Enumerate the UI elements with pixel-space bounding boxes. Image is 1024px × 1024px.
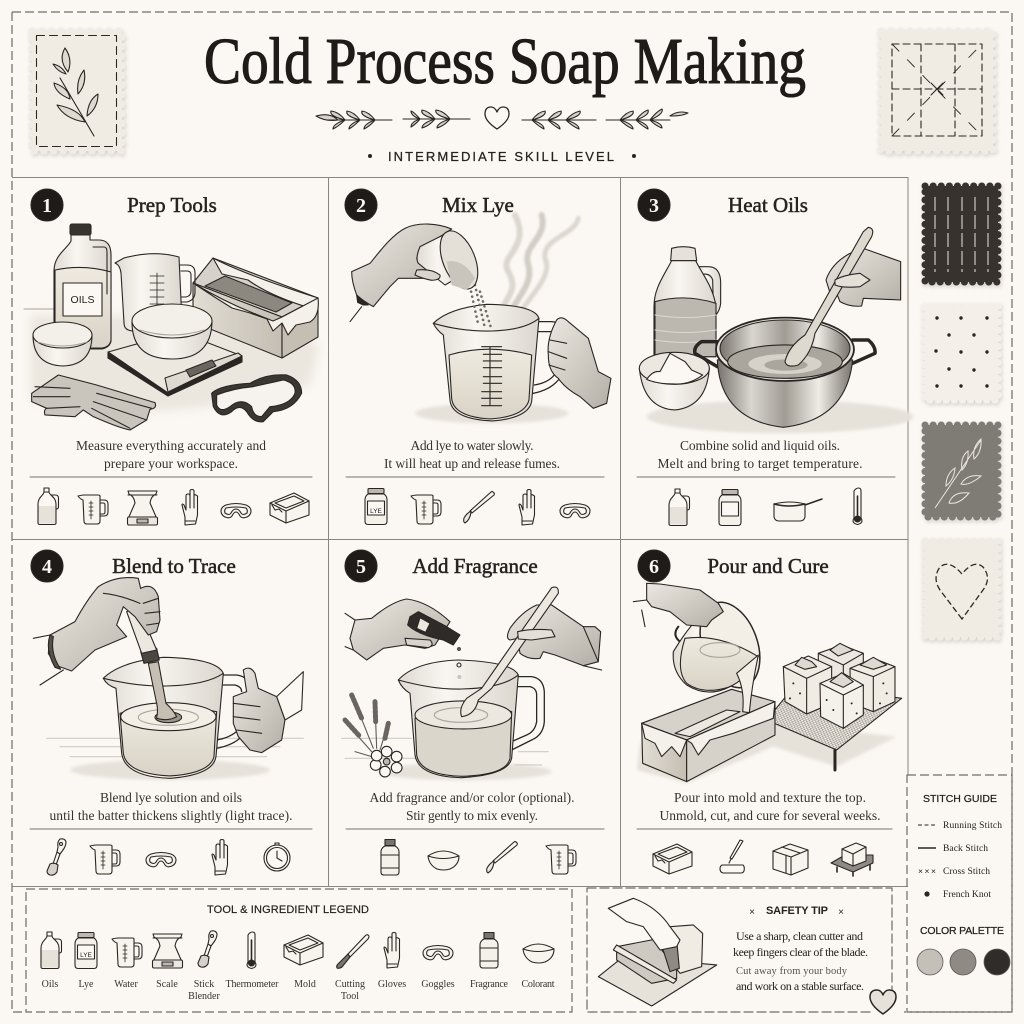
illustration group: [350, 215, 611, 423]
icon row: [38, 488, 309, 525]
illustration group: [342, 587, 602, 780]
legend item: cutting tool: Tool: [341, 991, 359, 1002]
illustration group: [633, 583, 902, 783]
step description: [384, 438, 560, 471]
table shadow and lines: [47, 738, 303, 780]
title: Cold Process Soap Making: [204, 25, 806, 98]
illustration: digital scale: [108, 332, 242, 396]
header band: [32, 25, 993, 164]
panel: step 3 heat oils: [621, 178, 913, 539]
step number 3: [638, 189, 670, 221]
illustration: wooden mold with liner: [642, 689, 775, 782]
legend item: mold: [284, 935, 323, 990]
step description: Blend lye solution and oils: [100, 790, 242, 805]
illustration: bowl on scale: [132, 304, 212, 359]
stitch: running: Running Stitch: [943, 821, 1002, 831]
ornament: sprigs and heart divider: [316, 107, 688, 129]
step number 4: 4: [42, 556, 52, 578]
icon row: [653, 840, 873, 876]
illustration: stainless pot: [695, 318, 875, 427]
legend item: water: Water: [114, 979, 138, 990]
illustration: steam: [498, 215, 578, 328]
safety tip text: keep fingers clear of the blade.: [733, 945, 868, 959]
step number 6: 6: [649, 556, 659, 578]
step description: until the batter thickens slightly (light trace).: [50, 808, 292, 823]
legend item: stick blender: Stick: [194, 979, 214, 990]
right column fabric swatches: [925, 186, 998, 637]
illustration group: [639, 227, 913, 433]
illustration: cooling rack: [767, 683, 902, 770]
safety tip title: [749, 905, 844, 918]
illustration: gloved hand with cup: [350, 224, 485, 322]
heading: Heat Oils: [728, 193, 808, 217]
panel: step 5 add fragrance: [329, 540, 620, 886]
legend item: gloves: Gloves: [378, 979, 406, 990]
legend item: scale: [152, 934, 182, 990]
illustration: spatula and right hand: [461, 587, 602, 717]
illustration: lavender and flower: [345, 695, 402, 777]
safety tip text: Use a sharp, clean cutter and: [736, 929, 863, 943]
step number 2: 2: [356, 195, 366, 217]
illustration: measuring jug with water: [433, 304, 565, 421]
step description: Stir gently to mix evenly.: [406, 808, 538, 823]
step description: Add fragrance and/or color (optional).: [370, 790, 574, 805]
icon: heart: [870, 990, 896, 1014]
patch: stitched square: [881, 31, 993, 151]
table shadow: [647, 400, 913, 433]
illustration: gloved hand on blender: [33, 578, 160, 685]
icon row: [381, 840, 576, 875]
table shadow: [415, 403, 568, 423]
legend item: thermometer: [226, 932, 279, 990]
legend item: lye: [75, 932, 97, 990]
swatch: dotted cream: [925, 306, 998, 400]
stitch: french knot: French Knot: [943, 890, 991, 900]
stitch guide title: STITCH GUIDE: [923, 793, 997, 805]
illustration: wooden mold with liner: [193, 258, 318, 358]
legend item: colorant: [522, 944, 555, 990]
step description: [658, 438, 862, 471]
palette swatches: [917, 949, 1010, 975]
legend item: goggles: Goggles: [421, 979, 455, 990]
step description: [660, 790, 880, 823]
legend item: water: [112, 938, 142, 990]
heading: Blend to Trace: [112, 554, 236, 578]
panel: step 4 blend to trace: [13, 540, 328, 886]
illustration: hand cutting soap: [598, 898, 717, 1006]
legend item: oils: [41, 932, 62, 990]
illustration: bowl of solid oils: [639, 352, 709, 410]
legend item: fragrance: Fragrance: [470, 979, 509, 990]
legend item: cutting tool: [335, 935, 369, 1002]
stitch: cross: ×××: [918, 866, 936, 876]
step description: It will heat up and release fumes.: [384, 456, 560, 471]
illustration: safety goggles: [212, 375, 302, 422]
step description: [370, 790, 574, 823]
step number 3: 3: [649, 195, 659, 217]
legend item: stick blender: [188, 931, 220, 1002]
step description: Add lye to water slowly.: [410, 438, 534, 453]
legend item: lye: Lye: [78, 979, 94, 990]
panel: step 2 mix lye: [329, 178, 620, 539]
patch: leaf sprig: [32, 31, 122, 151]
illustration: gloved hand on handle: [233, 668, 303, 753]
illustration: soap cubes: [783, 643, 895, 728]
heading: Add Fragrance: [412, 554, 538, 578]
illustration: measuring cup: [115, 254, 195, 331]
step number 5: 5: [356, 556, 366, 578]
illustration: left hand with dropper bottle: [345, 599, 461, 679]
legend item: fragrance: [470, 932, 509, 990]
illustration: supporting gloved hand: [548, 318, 611, 408]
heading: Prep Tools: [127, 193, 217, 217]
step number 1: 1: [42, 195, 52, 217]
legend item: colorant: Colorant: [522, 979, 555, 990]
subtitle: INTERMEDIATE SKILL LEVEL: [388, 149, 615, 164]
panel: safety tip: [587, 888, 896, 1014]
stitch: cross: [918, 866, 990, 877]
panel: tool and ingredient legend: [26, 889, 572, 1012]
palette title: COLOR PALETTE: [920, 925, 1004, 937]
stitch guide and colour palette panel: [907, 775, 1012, 1012]
legend title: TOOL & INGREDIENT LEGEND: [207, 904, 369, 916]
illustration: falling lye grains: [470, 285, 492, 330]
safety tip title: ×: [838, 907, 844, 918]
icon row: LYE: [370, 508, 383, 515]
icon row: [47, 839, 290, 875]
table shadow and lines: [342, 738, 552, 780]
illustration: small bowl: [33, 322, 92, 366]
legend item: oils: Oils: [42, 979, 58, 990]
illustration: gloved pouring hand: [633, 583, 723, 627]
legend item: lye: LYE: [80, 952, 93, 959]
heading: Pour and Cure: [707, 554, 829, 578]
stitch: back: Back Stitch: [943, 844, 988, 854]
legend item: stick blender: Blender: [188, 991, 220, 1002]
panel: step 6 pour and cure: [621, 540, 908, 886]
legend item: goggles: [421, 946, 455, 990]
stitch: back: [918, 844, 988, 854]
legend item: gloves: [378, 932, 406, 990]
step description: Unmold, cut, and cure for several weeks.: [660, 808, 880, 823]
step description: Measure everything accurately and: [76, 438, 266, 453]
safety tip text: Cut away from your body: [736, 966, 848, 977]
safety tip text: [733, 929, 868, 993]
legend item: thermometer: Thermometer: [226, 979, 279, 990]
icon row: [669, 488, 862, 526]
swatch: grey with leaf: [925, 425, 998, 517]
step description: Pour into mold and texture the top.: [674, 790, 866, 805]
heading: Mix Lye: [442, 193, 514, 217]
illustration: stick blender: [127, 607, 182, 723]
legend item: cutting tool: Cutting: [335, 979, 365, 990]
swatch: heart stitch: [925, 541, 998, 637]
step number 1: [31, 189, 63, 221]
illustration: oil bottle: [54, 224, 111, 349]
step description: prepare your workspace.: [104, 456, 238, 471]
table shadow: [637, 723, 897, 783]
stitch: cross: Cross Stitch: [943, 867, 990, 877]
icon row: [365, 488, 590, 525]
swatch: dark running stitches: [925, 186, 998, 282]
illustration: pouring jug and batter stream: [673, 594, 771, 713]
table and shadow: [30, 315, 320, 412]
illustration: rubber gloves: [32, 375, 156, 430]
safety tip title: ×: [749, 907, 755, 918]
step number 2: [345, 189, 377, 221]
illustration: batter jug: [103, 657, 250, 778]
illustration: hand with spoon: [785, 227, 901, 366]
illustration: batter jug: [398, 660, 544, 778]
legend item: mold: Mold: [294, 979, 316, 990]
step description: Melt and bring to target temperature.: [658, 456, 862, 471]
illustration: oil bottle: OILS: [71, 294, 94, 306]
safety tip text: and work on a stable surface.: [736, 979, 864, 993]
step description: Combine solid and liquid oils.: [680, 438, 840, 453]
illustration: oil bottle: [654, 247, 721, 357]
step description: [50, 790, 292, 823]
safety tip title: SAFETY TIP: [766, 905, 828, 917]
step number 4: [31, 550, 63, 582]
step number 5: [345, 550, 377, 582]
step number 6: [638, 550, 670, 582]
illustration group: [33, 578, 303, 780]
step description: [76, 438, 266, 471]
legend item: scale: Scale: [156, 979, 178, 990]
panel: step 1 prep tools: [13, 178, 328, 539]
